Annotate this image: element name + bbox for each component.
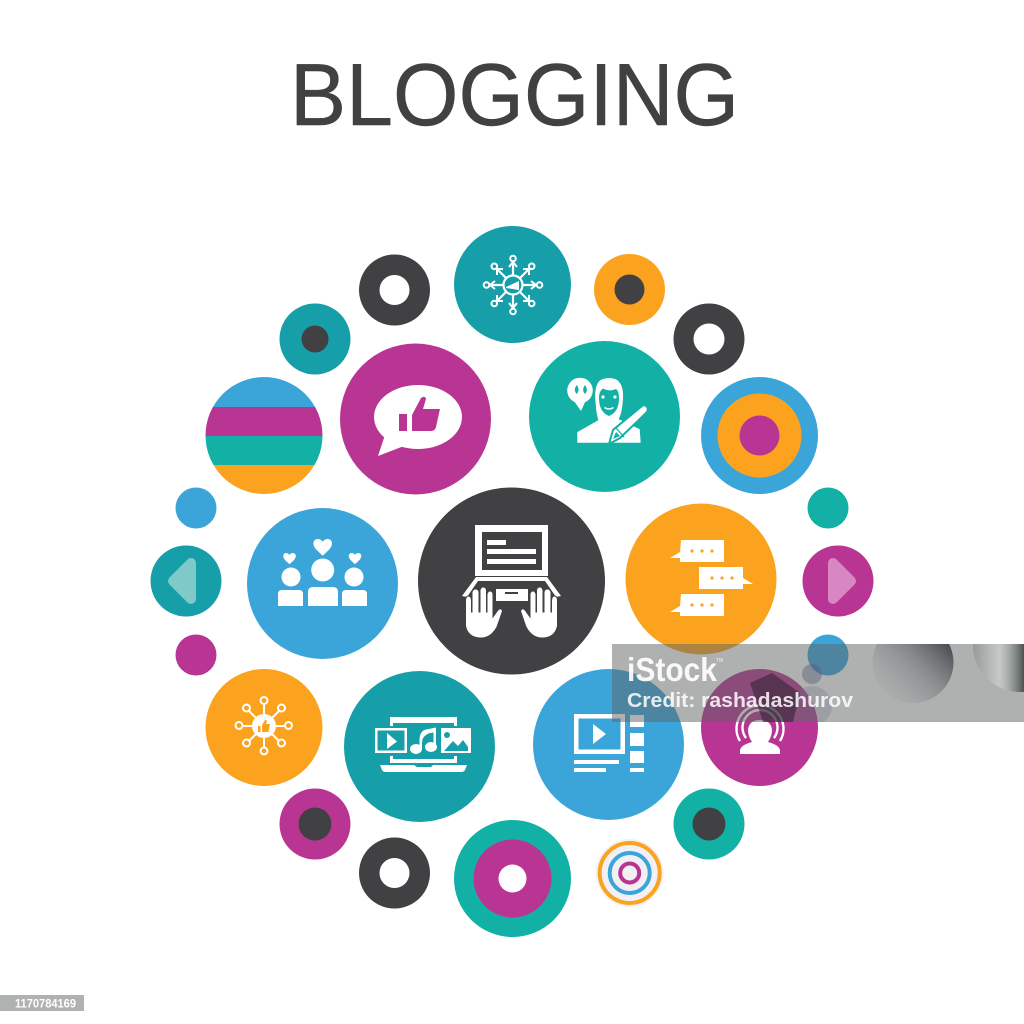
circle: media laptop [344, 671, 495, 822]
icon: person with signal arcs [736, 705, 783, 754]
icon: author with pencil and quote bubble [567, 378, 648, 444]
watermark credit: Credit: rashadashurov [627, 690, 854, 712]
decorative ring: lower dark donut [359, 838, 430, 908]
arrow: left triangle button [150, 546, 222, 616]
circle: chat bubbles [626, 504, 776, 654]
circle: author writing [529, 341, 680, 492]
icon: thumbs up hub [236, 697, 292, 754]
dot: right upper teal [808, 488, 848, 528]
icon: megaphone network [484, 256, 542, 314]
circle: striped left [205, 377, 323, 495]
circle: audience with hearts [247, 508, 398, 659]
circle: centre laptop and hands [418, 488, 605, 674]
dot: left upper blue [176, 488, 216, 528]
icon: laptop typing hands [462, 525, 561, 638]
target: small concentric rings [596, 839, 664, 907]
decorative ring: upper-left teal dot [280, 304, 350, 374]
watermark band [612, 644, 1024, 722]
decorative ring: top-left dark donut [359, 254, 430, 326]
dot: left lower purple [176, 634, 216, 676]
circle: like network [206, 669, 322, 786]
image id tag: 1170784169 [15, 996, 76, 1010]
icon: three chat bubbles [670, 540, 753, 616]
watermark logo: iStock [627, 651, 718, 688]
circle: broadcasting person [701, 669, 818, 786]
circle: thumbs-up speech bubble [340, 344, 491, 494]
title: BLOGGING [290, 45, 739, 144]
icon: three people with hearts [278, 539, 367, 606]
decorative ring: upper-right dark donut [674, 304, 744, 374]
icon: video player with sidebar [574, 714, 644, 772]
icon: laptop with play, music and image [375, 717, 471, 772]
decorative ring: lower-left purple dot [280, 788, 350, 860]
decorative ring: lower-right teal dot [674, 788, 744, 860]
circle: top megaphone network [454, 226, 571, 343]
image id tag [0, 995, 84, 1011]
arrow: right triangle button [802, 546, 874, 616]
circle: video page [533, 669, 684, 820]
watermark trademark: TM [716, 658, 723, 664]
dot: right lower blue [808, 634, 848, 676]
circle: concentric target right [701, 377, 818, 494]
decorative ring: top-right orange dot [594, 254, 665, 325]
icon: speech bubble with thumbs up [374, 385, 462, 456]
circle: bottom teal and purple ring [454, 820, 571, 937]
